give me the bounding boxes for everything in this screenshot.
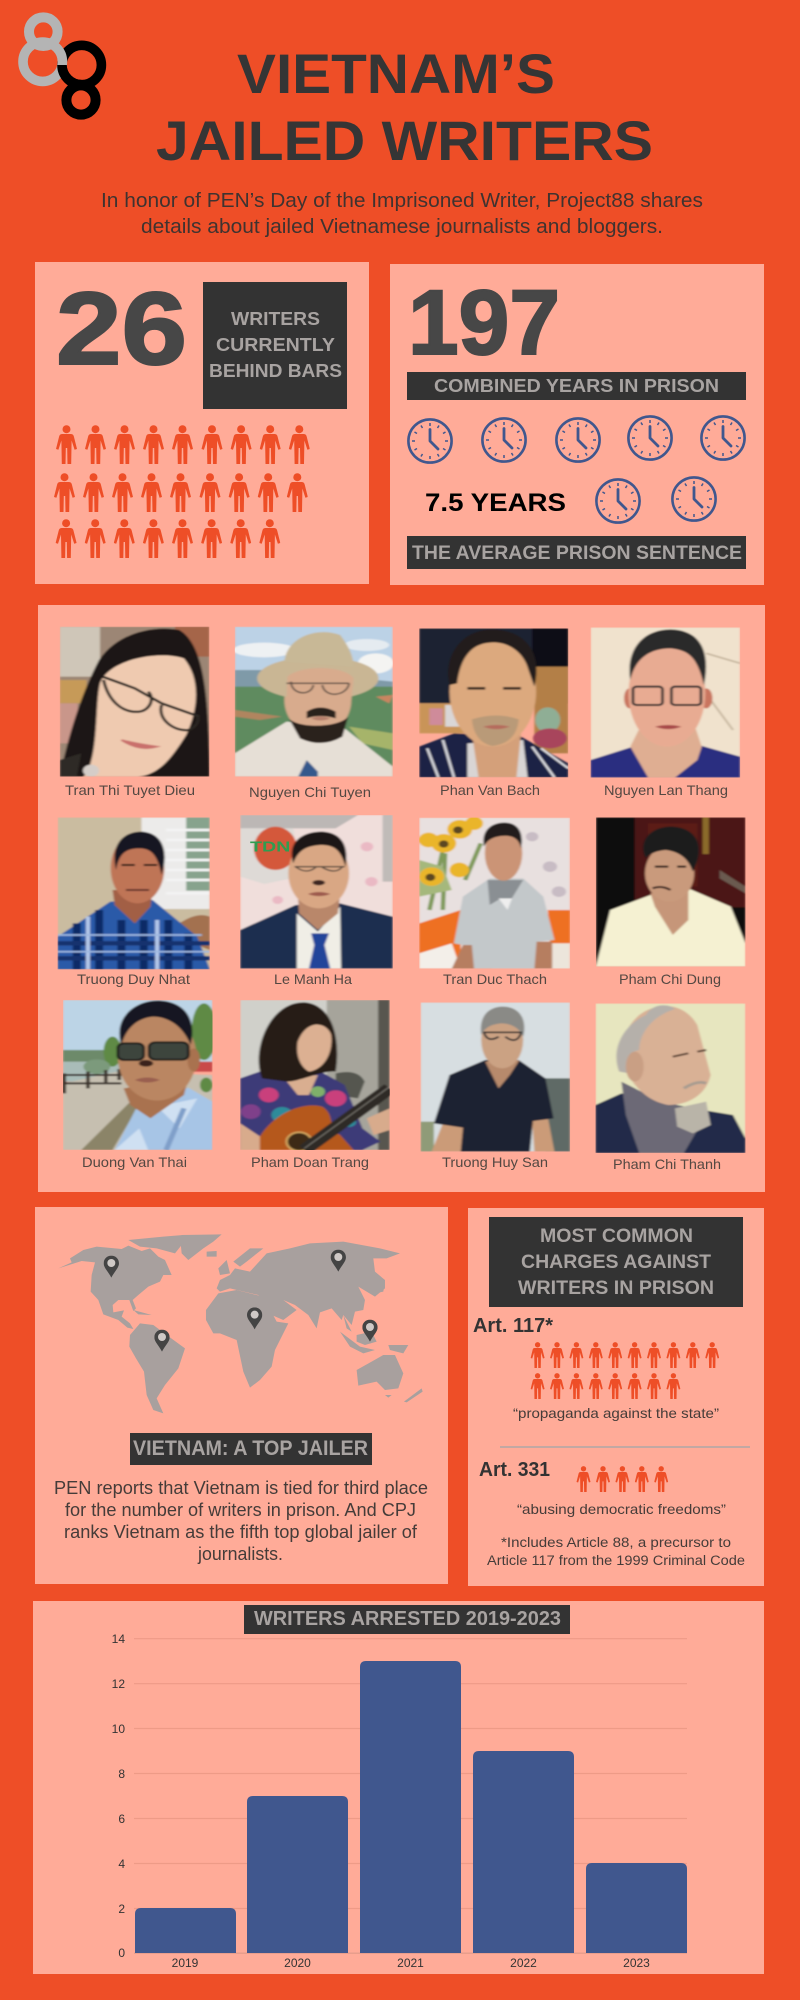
label box: writers currently behind bars: BEHIND BARS — [209, 361, 342, 381]
chart heading: WRITERS ARRESTED 2019-2023 — [254, 1608, 561, 1630]
bar chart — [135, 1661, 687, 1953]
body text: ranks Vietnam as the fifth top global jailer of — [64, 1522, 418, 1542]
panel: most common charges — [468, 1208, 764, 1586]
portrait names: Phan Van Bach — [440, 782, 540, 798]
portrait names: Duong Van Thai — [82, 1154, 187, 1170]
y axis labels: 6 — [118, 1812, 125, 1826]
body text: journalists. — [197, 1544, 283, 1564]
footnote: Article 117 from the 1999 Criminal Code — [487, 1553, 745, 1568]
logo: Project88 — [23, 17, 101, 115]
caption: abusing democratic freedoms: “abusing democratic freedoms” — [517, 1501, 726, 1517]
portrait names — [65, 782, 728, 1172]
panel: 197 combined years — [390, 264, 764, 585]
portraits row 1 — [60, 627, 740, 778]
stat: 7.5 years: 7.5 YEARS — [425, 489, 566, 517]
people icons: Art. 331 — [576, 1466, 668, 1492]
y axis labels: 10 — [112, 1722, 125, 1736]
label box: writers currently behind bars: WRITERS — [231, 309, 320, 329]
y axis labels: 14 — [112, 1632, 125, 1646]
x axis labels — [172, 1956, 650, 1970]
panel: 26 writers — [35, 262, 369, 584]
photo: Nguyen Lan Thang — [590, 628, 740, 778]
bar: 2021 = 13 — [360, 1661, 461, 1953]
label box: most common charges — [489, 1217, 743, 1307]
bar: 2020 = 7 — [247, 1796, 348, 1953]
portraits row 2 — [58, 815, 745, 969]
photo: Tran Duc Thach — [419, 818, 570, 969]
portrait names: Nguyen Lan Thang — [604, 782, 728, 798]
portrait names: Tran Thi Tuyet Dieu — [65, 782, 195, 798]
footnote — [487, 1535, 745, 1568]
portrait names: Pham Doan Trang — [251, 1154, 369, 1170]
portrait names: Pham Chi Dung — [619, 971, 721, 987]
panel: writers arrested chart — [33, 1601, 764, 1974]
clock icons pair — [596, 477, 716, 523]
label box: most common charges: MOST COMMON — [540, 1226, 693, 1247]
body text — [54, 1478, 428, 1564]
people icons: Art. 117 — [531, 1342, 719, 1399]
x axis labels: 2019 — [172, 1956, 199, 1970]
photo: Pham Doan Trang — [240, 1000, 390, 1150]
portraits row 3 — [63, 1000, 745, 1153]
photo: Tran Thi Tuyet Dieu — [60, 626, 210, 777]
label bar: combined years in prison: COMBINED YEARS IN PRISON — [434, 376, 719, 396]
stat: 26: 26 — [56, 271, 187, 386]
portrait names: Tran Duc Thach — [443, 971, 547, 987]
photo: Truong Duy Nhat — [58, 817, 210, 970]
bar: 2023 = 4 — [586, 1863, 687, 1953]
title: VIETNAM’S — [237, 42, 555, 105]
label box: writers currently behind bars: CURRENTLY — [216, 335, 335, 355]
label bar: Vietnam a top jailer — [130, 1433, 372, 1465]
photo: Le Manh Ha: TDN — [250, 838, 290, 855]
label box: most common charges: WRITERS IN PRISON — [518, 1278, 714, 1299]
y axis labels: 2 — [118, 1902, 125, 1916]
photo: Truong Huy San — [420, 1002, 570, 1152]
photo: Phan Van Bach — [419, 628, 568, 778]
portrait names: Nguyen Chi Tuyen — [249, 784, 371, 800]
title — [156, 42, 653, 172]
photo: Pham Chi Dung — [596, 817, 746, 966]
portrait names: Pham Chi Thanh — [613, 1156, 721, 1172]
clock icons row — [408, 416, 745, 463]
panel: Vietnam a top jailer — [35, 1207, 448, 1584]
footnote: *Includes Article 88, a precursor to — [501, 1535, 731, 1550]
y axis labels: 4 — [118, 1857, 125, 1871]
x axis labels: 2023 — [623, 1956, 650, 1970]
heading: Art. 117: Art. 117* — [473, 1315, 553, 1337]
title: JAILED WRITERS — [156, 109, 653, 172]
photo: Le Manh Ha — [240, 815, 393, 969]
heading: Art. 331: Art. 331 — [479, 1459, 550, 1481]
bar: 2022 = 9 — [473, 1751, 574, 1953]
y axis labels: 0 — [118, 1946, 125, 1960]
photo: Duong Van Thai — [63, 1000, 212, 1150]
photo: Nguyen Chi Tuyen — [234, 626, 393, 777]
y axis labels — [112, 1632, 125, 1960]
label bar: average sentence: THE AVERAGE PRISON SENTENCE — [412, 542, 742, 564]
x axis labels: 2022 — [510, 1956, 537, 1970]
label bar: combined years in prison — [407, 372, 746, 400]
caption: propaganda against the state: “propaganda against the state” — [513, 1405, 719, 1421]
portrait names: Truong Duy Nhat — [77, 971, 190, 987]
body text: for the number of writers in prison. And CPJ — [65, 1500, 416, 1520]
photo: Pham Chi Thanh — [596, 1004, 746, 1153]
portrait names: Le Manh Ha — [274, 971, 352, 987]
subtitle — [101, 190, 703, 238]
portrait names: Truong Huy San — [442, 1154, 548, 1170]
people icons: 26 writers — [54, 425, 310, 558]
subtitle: In honor of PEN’s Day of the Imprisoned Writer, Project88 shares — [101, 190, 703, 212]
label bar: average sentence — [407, 536, 746, 569]
label box: most common charges: CHARGES AGAINST — [521, 1252, 711, 1273]
world map with pins — [58, 1234, 423, 1413]
label box: writers currently behind bars — [203, 282, 347, 409]
x axis labels: 2021 — [397, 1956, 424, 1970]
stat: 197: 197 — [408, 272, 560, 374]
x axis labels: 2020 — [284, 1956, 311, 1970]
panel: portraits — [38, 605, 765, 1192]
subtitle: details about jailed Vietnamese journalists and bloggers. — [141, 216, 663, 238]
bar: 2019 = 2 — [135, 1908, 236, 1953]
body text: PEN reports that Vietnam is tied for third place — [54, 1478, 428, 1498]
y axis labels: 12 — [112, 1677, 125, 1691]
y axis labels: 8 — [118, 1767, 125, 1781]
label bar: Vietnam a top jailer: VIETNAM: A TOP JAILER — [133, 1437, 368, 1460]
